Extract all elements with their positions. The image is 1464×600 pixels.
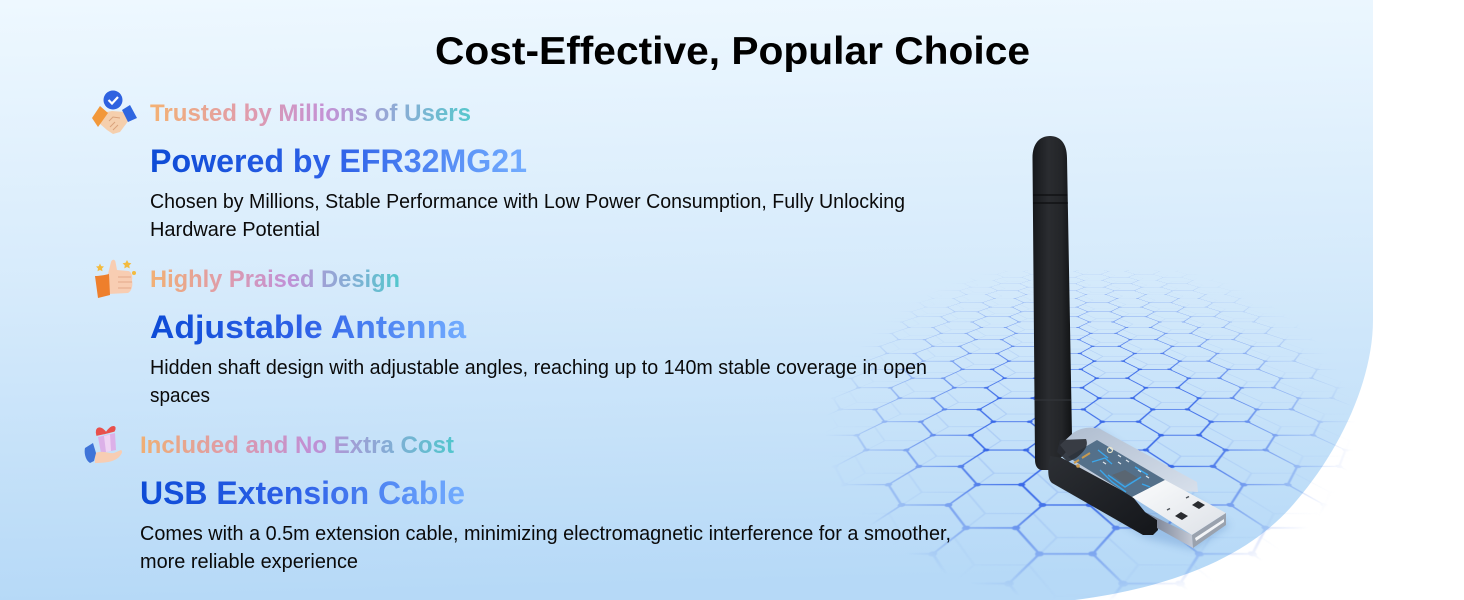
product: USB dongle with antenna (1032, 136, 1230, 550)
label: Highly Praised Design: Highly Praised Design (150, 266, 400, 293)
dongle shadow (1050, 430, 1230, 550)
description: Chosen by Millions, Stable Performance with Low Power Consumption, Fully Unlocking (150, 190, 905, 213)
heading: Adjustable Antenna: Adjustable Antenna (150, 309, 466, 345)
heading: Powered by EFR32MG21: Powered by EFR32MG21 (150, 143, 527, 179)
icon: handshake with check badge (92, 90, 137, 134)
icon: thumbs up (95, 260, 136, 298)
feature block: Adjustable Antenna (95, 260, 927, 407)
icon: gift on open hand (85, 427, 122, 463)
feature block: Powered by EFR32MG21 (92, 90, 905, 241)
circuit board (1057, 439, 1165, 497)
description: Hardware Potential (150, 218, 320, 241)
translucent housing (1060, 428, 1198, 498)
label: Included and No Extra Cost: Included and No Extra Cost (140, 432, 454, 459)
description: Hidden shaft design with adjustable angles, reaching up to 140m stable coverage in open (150, 356, 927, 379)
USB metal connector (1132, 480, 1226, 548)
description: spaces (150, 384, 210, 407)
description: Comes with a 0.5m extension cable, minimizing electromagnetic interference for a smoother, (140, 522, 951, 545)
title: Cost-Effective, Popular Choice (435, 30, 1030, 73)
label: Trusted by Millions of Users: Trusted by Millions of Users (150, 100, 471, 127)
hexagon grid floor in perspective (834, 270, 1346, 596)
heading: USB Extension Cable: USB Extension Cable (140, 475, 465, 511)
feature block: USB Extension Cable (85, 427, 951, 573)
description: more reliable experience (140, 550, 358, 573)
dark lower housing (1048, 456, 1158, 535)
antenna (1032, 136, 1072, 470)
